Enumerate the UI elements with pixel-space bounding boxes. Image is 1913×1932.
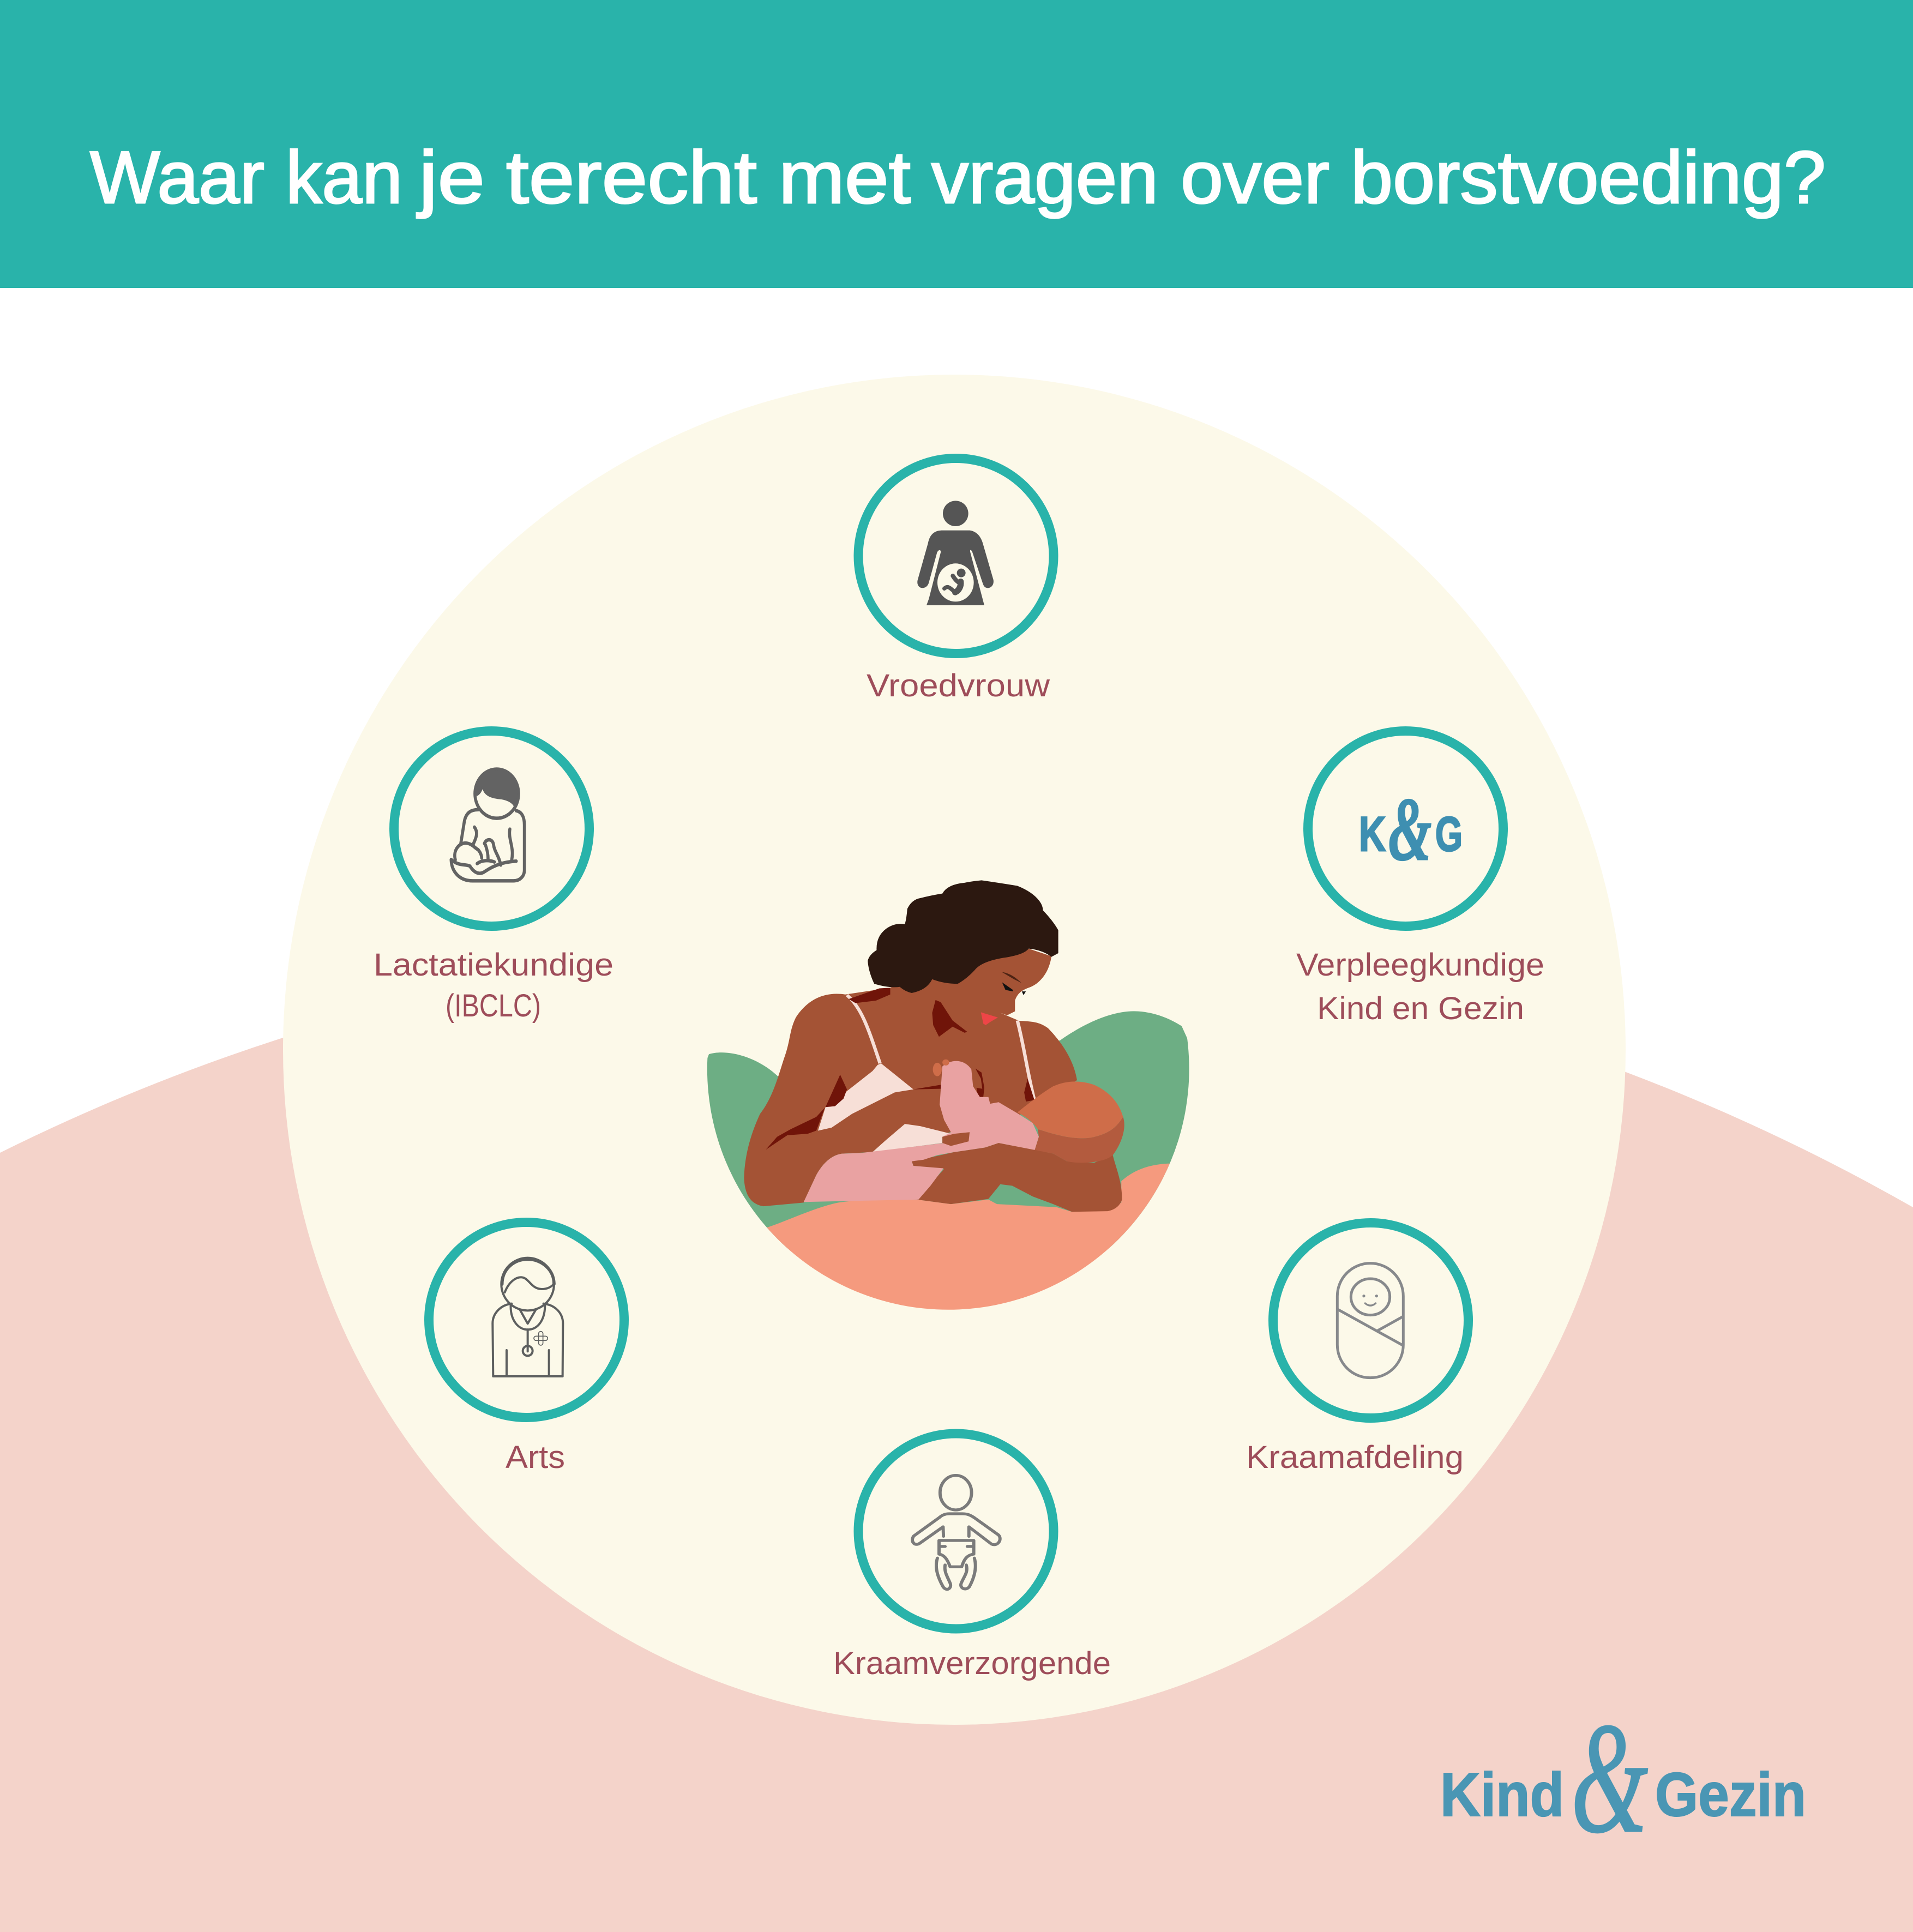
green leaves: [707, 1011, 1189, 1249]
title: over: [1181, 136, 1330, 219]
mother torso and left arm: [744, 949, 1077, 1206]
ring: [394, 731, 589, 926]
title: terecht: [506, 136, 757, 219]
label: Vroedvrouw: [867, 668, 1050, 703]
ring: [429, 1223, 624, 1418]
facial details: [1002, 972, 1021, 983]
ring: [858, 1434, 1054, 1629]
logo: Kind & Gezin: &: [1571, 1690, 1649, 1865]
icon: K&G logo: &: [1388, 779, 1431, 879]
ring: [858, 458, 1054, 653]
eyelashes: [1002, 982, 1026, 995]
icon: pregnant woman: [917, 501, 994, 605]
item: Verpleegkundige Kind en Gezin: [1296, 731, 1544, 1026]
baby blanket lower: [804, 1143, 954, 1202]
title: kan: [286, 136, 402, 219]
illustration: breastfeeding mother and baby: [707, 880, 1189, 1310]
title: met: [779, 136, 911, 219]
item: Kraamverzorgende: [833, 1434, 1111, 1681]
mother right arm: [912, 1143, 1122, 1212]
header band: [0, 0, 1913, 288]
logo: Kind & Gezin: [1440, 1690, 1806, 1865]
sublabel: Kind en Gezin: [1317, 991, 1524, 1026]
icon: K&G logo: K: [1359, 806, 1386, 861]
label: Kraamverzorgende: [833, 1646, 1111, 1681]
logo: Kind & Gezin: Gezin: [1655, 1760, 1806, 1829]
baby hand fingers: [933, 1060, 949, 1076]
bra straps: [847, 995, 1034, 1100]
icon: K&G logo: G: [1435, 806, 1463, 861]
lips: [981, 1012, 998, 1025]
cream central circle: [283, 375, 1626, 1725]
label: Lactatiekundige: [374, 947, 613, 983]
title: vragen: [931, 136, 1158, 219]
item: Kraamafdeling: [1246, 1223, 1468, 1475]
ring: [1273, 1223, 1468, 1418]
label: Verpleegkundige: [1296, 947, 1544, 983]
label: Kraamafdeling: [1246, 1440, 1464, 1475]
sublabel: (IBCLC): [446, 988, 541, 1024]
title: [90, 136, 1826, 219]
baby head lower: [1035, 1117, 1124, 1163]
title: borstvoeding?: [1351, 136, 1826, 219]
icon: doctor: [492, 1258, 563, 1376]
baby arm and body: [940, 1061, 1039, 1152]
pink background mound: [0, 940, 1913, 1932]
item: Lactatiekundige: [374, 731, 613, 1024]
item: Vroedvrouw: [858, 458, 1054, 703]
peach blanket: [767, 1164, 1170, 1310]
mother fingers: [942, 1132, 970, 1146]
hair: [868, 880, 1058, 993]
dark shadows: [766, 988, 1034, 1149]
ring: [1308, 731, 1503, 926]
label: Arts: [506, 1440, 565, 1475]
item: Arts: [429, 1223, 624, 1475]
icon: swaddled baby: [1337, 1263, 1403, 1378]
title: Waar: [90, 136, 264, 219]
icon: baby in diaper: [912, 1476, 1000, 1590]
white top: [818, 1063, 953, 1152]
title: je: [416, 136, 485, 219]
logo: Kind & Gezin: Kind: [1440, 1760, 1564, 1829]
icon: K&G logo: [1359, 779, 1463, 879]
baby head upper: [1018, 1081, 1123, 1138]
icon: breastfeeding woman: [451, 769, 525, 881]
